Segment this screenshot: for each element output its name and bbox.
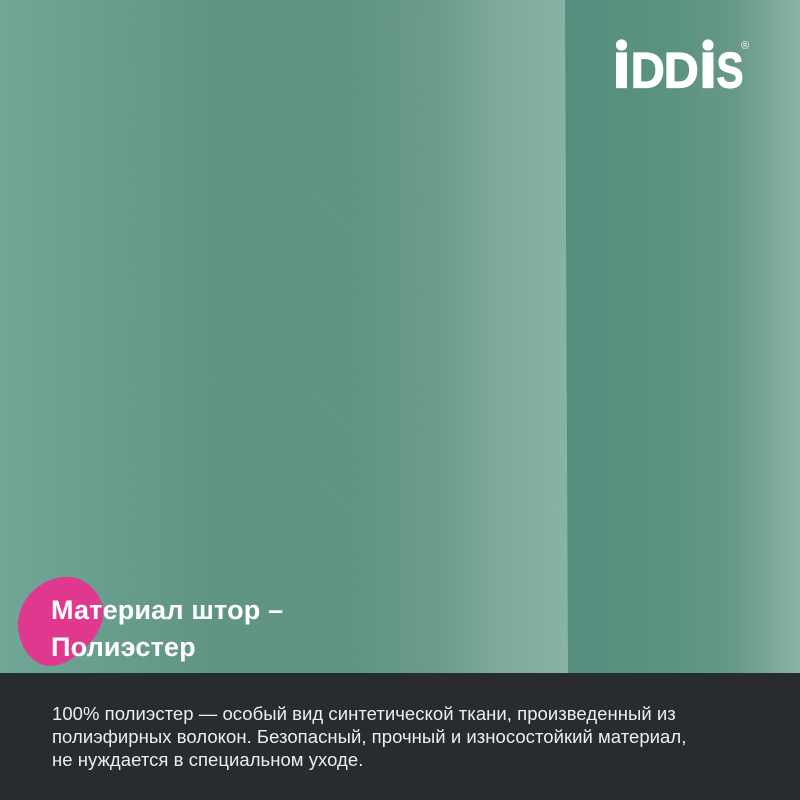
- logo: IDDIS: [612, 39, 749, 95]
- icon: pink blob behind heading: [18, 577, 104, 666]
- text block: description: 100% полиэстер — особый вид синтетической ткани, произведенный из: [52, 703, 676, 724]
- heading: Материал штор –: [51, 595, 283, 625]
- panel: dark text band: [0, 673, 800, 800]
- text block: description: полиэфирных волокон. Безопасный, прочный и износостойкий материал,: [52, 726, 686, 747]
- text block: description: [52, 703, 686, 770]
- heading: Полиэстер: [51, 632, 196, 662]
- text block: description: не нуждается в специальном уходе.: [52, 749, 363, 770]
- heading: [51, 595, 283, 662]
- logo: IDDIS: ®: [741, 40, 749, 52]
